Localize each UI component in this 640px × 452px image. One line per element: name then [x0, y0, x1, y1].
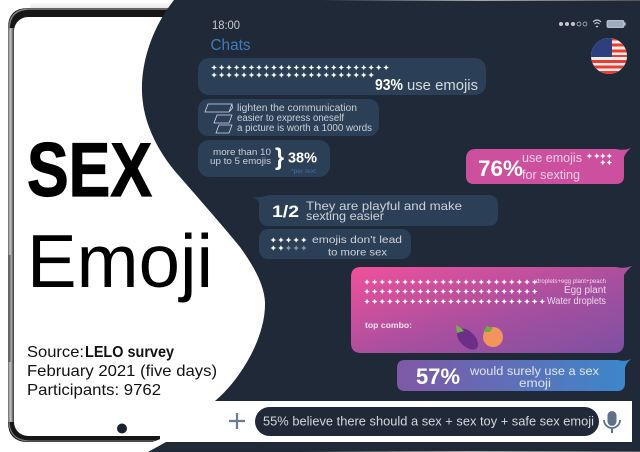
- bubble: emojis don't lead to more sex: emojis don't lead: [312, 234, 402, 246]
- bubble: 1/2 playful: They are playful and make: [306, 199, 462, 213]
- bubble: 93% use emojis: 93%: [375, 77, 403, 94]
- bubble: egg plant and water droplets: Egg plant: [564, 285, 606, 296]
- bubble: 76% for sexting: use emojis: [522, 151, 582, 165]
- stars: [586, 153, 612, 165]
- star rows: [210, 64, 390, 78]
- source text: LELO survey: [85, 344, 174, 361]
- source text: Source:: [27, 344, 84, 361]
- bubble: reasons: [198, 99, 379, 136]
- bubble: egg plant and water droplets: top combo:: [365, 321, 412, 330]
- bubble: egg plant and water droplets: [351, 266, 632, 353]
- source text: [27, 344, 217, 399]
- status icons: [559, 20, 626, 28]
- icon: peach: [483, 326, 503, 347]
- icon: stacked bars: [205, 104, 232, 133]
- source text: Participants: 9762: [27, 382, 161, 399]
- title: [27, 128, 213, 303]
- dark chat background: [142, 0, 640, 401]
- title: SEX: [27, 128, 152, 213]
- bubble: 57% sex emoji: [397, 359, 631, 391]
- bubble: egg plant and water droplets: Water droplets: [547, 296, 606, 307]
- bubble: 76% for sexting: 76%: [478, 156, 523, 181]
- bubble: 1/2 playful: sexting easier: [306, 209, 384, 223]
- message pill: [255, 407, 599, 436]
- bubble: 93% use emojis: [198, 58, 486, 95]
- icon: US flag: [591, 38, 627, 74]
- status time: 18:00: [212, 20, 240, 32]
- bubble: 38% per text: [198, 140, 330, 177]
- bubble: 57% sex emoji: 57%: [416, 364, 460, 389]
- heading: chats: Chats: [210, 37, 251, 54]
- bubble: egg plant and water droplets: droplets+egg plant+peach: [536, 278, 606, 285]
- top edge highlight: [320, 0, 640, 1]
- bubble: reasons: easier to express oneself: [237, 113, 344, 124]
- star rows: [270, 237, 308, 251]
- source text: February 2021 (five days): [27, 363, 217, 380]
- bubble: 57% sex emoji: would surely use a sex: [469, 366, 599, 378]
- message pill: 55% believe there should a sex + sex toy + safe sex emoji: [263, 414, 594, 428]
- icon: eggplant: [453, 325, 482, 353]
- bubble: 38% per text: up to 5 emojis: [210, 156, 271, 167]
- title: Emoji: [27, 219, 213, 303]
- star rows: [363, 279, 546, 304]
- bubble: 1/2 playful: [252, 195, 498, 226]
- bubble: 57% sex emoji: emoji: [519, 378, 551, 390]
- icon: plus: [229, 413, 245, 429]
- bubble: 1/2 playful: 1/2: [272, 202, 299, 221]
- bubble: emojis don't lead to more sex: [259, 229, 411, 259]
- bubble: 76% for sexting: [466, 148, 631, 184]
- bubble: reasons: lighten the communication: [237, 103, 357, 114]
- bubble: 93% use emojis: use emojis: [407, 77, 478, 94]
- phone camera: [117, 424, 127, 434]
- bubble: 76% for sexting: for sexting: [522, 168, 580, 182]
- input bar: [148, 401, 640, 452]
- bubble: 38% per text: more than 10: [213, 147, 271, 158]
- bubble: 38% per text: *per text: [291, 169, 316, 175]
- icon: microphone: [604, 411, 620, 433]
- bubble: 38% per text: 38%: [288, 150, 317, 166]
- bubble: emojis don't lead to more sex: to more sex: [328, 246, 388, 258]
- bubble: 38% per text: }: [275, 144, 284, 171]
- phone frame: [8, 2, 414, 443]
- bubble: reasons: a picture is worth a 1000 words: [237, 123, 372, 134]
